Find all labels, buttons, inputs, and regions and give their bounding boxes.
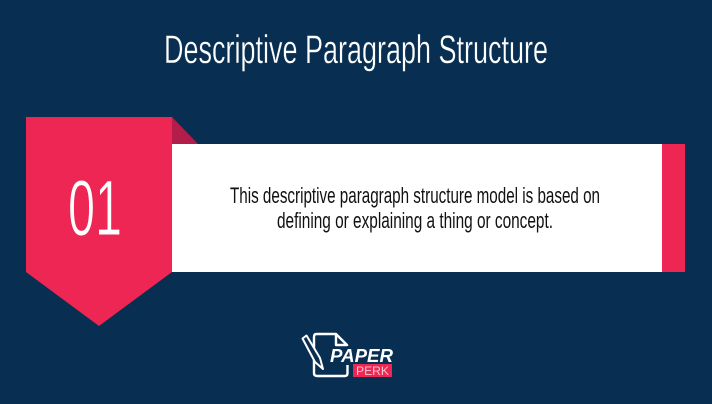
icon: document bbox=[314, 334, 348, 376]
card description bbox=[230, 183, 600, 233]
white card bbox=[172, 144, 662, 272]
ribbon shape bbox=[26, 117, 172, 326]
panel: content card bbox=[172, 144, 685, 272]
card description: defining or explaining a thing or concept. bbox=[277, 208, 553, 233]
number 01: 01 bbox=[68, 163, 122, 252]
red end strip bbox=[662, 144, 685, 272]
icon: pencil bbox=[302, 336, 323, 369]
number ribbon bbox=[26, 117, 172, 326]
ribbon fold bbox=[172, 117, 198, 144]
logo: Paper Perk bbox=[302, 334, 394, 378]
logo word PAPER: PAPER bbox=[330, 345, 394, 366]
logo badge PERK: PERK bbox=[356, 364, 389, 378]
